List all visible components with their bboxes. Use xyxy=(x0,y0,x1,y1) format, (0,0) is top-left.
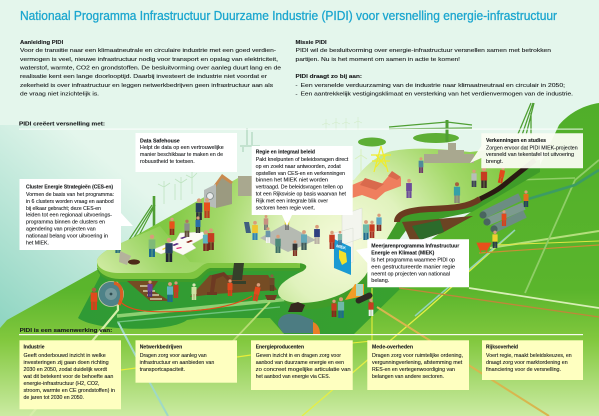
main green landscape xyxy=(0,103,599,416)
data safehouse building xyxy=(204,174,233,208)
road S-curve xyxy=(397,160,535,222)
text block: Missie PIDI: partijen. Nu is het moment om samen in actie te komen! xyxy=(296,57,460,63)
text block: Aanleiding PIDI: Aanleiding PIDI xyxy=(20,40,64,46)
callout: Regie en integraal beleid: opstellen van CES-en en verkenningen xyxy=(256,171,345,177)
panel: Industrie: investeringen zij gaan doen richting xyxy=(24,360,109,366)
callout: Regie en integraal beleid: tot een Rijksvisie op basis waarvan het xyxy=(256,192,347,198)
yellow pylon xyxy=(371,146,391,172)
panel: Mede-overheden: belangen van andere sectoren. xyxy=(372,374,444,380)
callout: Meerjarenprogramma: Meerjarenprogramma Infrastructuur xyxy=(371,244,459,250)
callout: Cluster Energie Strategieën: agendering van projecten van xyxy=(26,226,96,232)
callout: Cluster Energie Strategieën: leiden tot een regionaal uitvoerings- xyxy=(26,213,112,219)
callout: Cluster Energie Strategieën: bij elkaar gebracht; deze CES-en xyxy=(26,206,101,212)
heading: PIDI creëert versnelling met: PIDI creëert versnelling met: xyxy=(19,122,105,128)
callout: Verkenningen en studies: Verkenningen en studies xyxy=(486,138,546,144)
callout: Meerjarenprogramma: Energie en Klimaat (MIEK) xyxy=(371,251,435,257)
wind turbine near hill xyxy=(355,149,367,172)
panel: Energieproducenten: Geven inzicht in en dragen zorg voor xyxy=(256,353,341,359)
colored shapes on table xyxy=(162,236,193,250)
panel: Netwerkbedrijven: Netwerkbedrijven xyxy=(140,345,182,351)
raised plateau surface xyxy=(97,148,540,303)
text block: Aanleiding PIDI: vermogen is veel, nieuwe infrastructuur nodig voor transport en opslag van elektriciteit, xyxy=(20,57,278,63)
panel: Industrie: de jaren tot 2030 en 2050. xyxy=(24,395,84,401)
text block: Aanleiding PIDI: Voor de transitie naar een klimaatneutrale en circulaire industrie met een goed verdien- xyxy=(20,48,276,54)
steel pipes xyxy=(479,197,525,233)
laptop crate near tip xyxy=(119,251,131,265)
text block: PIDI draagt zo bij aan: Een aantrekkelijk vestigingsklimaat en versterking van het verdienvermogen van de industrie. xyxy=(300,92,573,98)
panel: Industrie: Geeft onderbouwd inzicht in welke xyxy=(24,353,106,359)
callout: Regie en integraal beleid: binnen het MIEK niet worden xyxy=(256,178,328,184)
pit under the road xyxy=(402,216,473,240)
teal roller machine xyxy=(278,302,320,335)
cable drum xyxy=(98,282,124,306)
panel: Industrie xyxy=(20,340,121,409)
panel: Mede-overheden: RES-en en vertegenwoordiging van xyxy=(372,367,455,373)
panel: Netwerkbedrijven: Dragen zorg voor aanleg van xyxy=(140,353,207,359)
callout: Meerjarenprogramma: neemt op projecten van nationaal xyxy=(371,271,450,277)
callout: Cluster Energie Strategieën: Cluster Energie Strategieën (CES-en) xyxy=(26,185,113,191)
callout: Meerjarenprogramma: een gestructureerde manier regie xyxy=(371,265,455,271)
callout: Cluster Energie Strategieën: in 6 clusters worden vraag en aanbod xyxy=(26,199,114,205)
panel: Energieproducenten: Energieproducenten xyxy=(256,345,304,351)
text block: Missie PIDI: PIDI wil de besluitvorming over energie-infrastructuur versnellen samen met betrokken xyxy=(296,48,551,54)
text block: Aanleiding PIDI xyxy=(19,40,282,98)
text block: Aanleiding PIDI: realisatie kent een lange doorlooptijd. Daarbij investeert de industrie niet voordat er xyxy=(20,74,267,80)
grey industrial buildings xyxy=(238,143,474,196)
panel: Mede-overheden: Mede-overheden xyxy=(372,345,413,351)
callout: Regie en integraal beleid: Pakt knelpunten of beleidsvragen direct xyxy=(256,157,349,163)
text block: PIDI draagt zo bij aan: Een versnelde verduurzaming van de industrie naar klimaatneutraal en circulair in 2050; xyxy=(300,83,565,89)
callout: Verkenningen en studies: versneld van tekentafel tot uitvoering xyxy=(486,152,574,158)
dark chair xyxy=(244,222,251,233)
panel: Energieproducenten: aanbod van duurzame energie en een xyxy=(256,360,344,366)
panel: Netwerkbedrijven xyxy=(136,340,237,383)
callout: Regie en integraal beleid xyxy=(252,146,353,226)
callout: Data Safehouse xyxy=(136,133,237,172)
callout: Meerjarenprogramma: Is het programma waarmee PIDI op xyxy=(371,258,455,264)
white jigsaw table xyxy=(152,232,205,255)
meeting table xyxy=(260,224,316,252)
underground dirt xyxy=(127,275,277,301)
red cable xyxy=(119,296,252,312)
network lines on the ground xyxy=(30,160,599,416)
back hills xyxy=(358,133,459,146)
panel: Mede-overheden xyxy=(367,340,469,390)
panel: Netwerkbedrijven: transportcapaciteit. xyxy=(140,367,185,373)
panel: Rijksoverheid: financiering voor de versnelling. xyxy=(486,367,561,373)
panel: Mede-overheden: vergunningverlening, afstemming met xyxy=(372,360,463,366)
heading: PIDI is een samenwerking van: PIDI is een samenwerking van: xyxy=(20,328,112,334)
callout: Cluster Energie Strategieën: nationaal belang voor uitvoering in xyxy=(26,233,108,239)
underground dark green zone xyxy=(78,262,402,335)
mine cart xyxy=(265,295,277,300)
panel: Mede-overheden: Dragen zorg voor ruimtelijke ordening, xyxy=(372,353,463,359)
title: Nationaal Programma Infrastructuur Duurzame Industrie (PIDI) voor versnelling energie-infrastructuur xyxy=(20,8,558,23)
callout: Verkenningen en studies: brengt. xyxy=(486,159,503,165)
teal gradient backdrop xyxy=(0,125,300,335)
callout: Verkenningen en studies xyxy=(470,133,583,168)
text block: Aanleiding PIDI: waterstof, warmte, CO2 en grondstoffen. De besluitvorming over aanleg duurt lang en de xyxy=(19,65,282,71)
workers and visitors xyxy=(91,157,528,318)
panel: Energieproducenten: het aanbod van energie via CES. xyxy=(256,374,330,380)
callout: Data Safehouse: robuustheid te toetsen. xyxy=(140,159,195,165)
callout: Regie en integraal beleid: op en zoekt naar antwoorden, zodat xyxy=(256,164,341,170)
panel: Industrie: 2030 en 2050, zodat duidelijk wordt xyxy=(24,367,108,373)
panel: Industrie: wat dit betekent voor de behoefte aan xyxy=(24,374,113,380)
distant offshore platform and wind turbines xyxy=(158,117,362,204)
MIEK blue sign: MIEK xyxy=(336,243,347,250)
text block: Missie PIDI xyxy=(296,40,551,63)
panel: Rijksoverheid: Rijksoverheid xyxy=(486,345,518,351)
panel: Rijksoverheid: Voert regie, maakt beleidskeuzes, en xyxy=(486,353,572,359)
red farmhouses xyxy=(352,171,401,200)
text block: PIDI draagt zo bij aan: PIDI draagt zo bij aan: xyxy=(296,74,362,80)
callout: Regie en integraal beleid: Regie en integraal beleid xyxy=(256,150,315,156)
callout: Data Safehouse: manier beschikbaar te maken en de xyxy=(140,152,223,158)
callout: Data Safehouse: Data Safehouse xyxy=(140,139,180,145)
callout: Cluster Energie Strategieën: het MIEK. xyxy=(26,240,49,246)
MIEK blue sign xyxy=(334,239,351,275)
callout: Meerjarenprogramma: belang. xyxy=(371,278,389,284)
callout: Cluster Energie Strategieën: Vormen de basis van het programma: xyxy=(26,192,114,198)
callout: Regie en integraal beleid: sectoren heen regie voert. xyxy=(256,205,315,211)
text block: Missie PIDI: Missie PIDI xyxy=(296,40,327,46)
orange wheelbarrow xyxy=(477,243,491,253)
callout: Regie en integraal beleid: vertraagd. De beleidsvragen tellen op xyxy=(256,185,343,191)
text block: Aanleiding PIDI: de vraag niet inzichtelijk is. xyxy=(20,92,99,98)
dark machine tracks xyxy=(232,263,246,284)
text block: Aanleiding PIDI: zekerheid is over infrastructuur en leggen netwerkbedrijven geen infrastructuur aan als xyxy=(20,83,273,89)
plateau bright band xyxy=(97,262,300,279)
crane and lattice masts xyxy=(127,103,534,245)
callout: Cluster Energie Strategieën: programma binnen de clusters en xyxy=(26,220,105,226)
MIEK white panels xyxy=(334,208,362,268)
stairs xyxy=(140,286,162,299)
panel: Industrie: Industrie xyxy=(24,345,45,351)
panel: Rijksoverheid xyxy=(482,340,583,380)
text block: PIDI draagt zo bij aan: - xyxy=(296,92,298,98)
callout: Regie en integraal beleid: Rijk met een integrale blik over xyxy=(256,198,328,204)
plateau pale rim xyxy=(97,226,208,273)
plateau underside shadow xyxy=(97,160,540,309)
callout: Data Safehouse: Helpt de data op een vertrouwelijke xyxy=(140,145,224,151)
text block: PIDI draagt zo bij aan xyxy=(296,74,573,98)
text block: PIDI draagt zo bij aan: - xyxy=(296,83,298,89)
callout: Meerjarenprogramma xyxy=(356,239,469,287)
panel: Industrie: energie-infrastructuur (H2, CO2, xyxy=(24,381,100,387)
panel: Netwerkbedrijven: infrastructuur en aanbieden van xyxy=(140,360,214,366)
orange digger and tracks xyxy=(345,284,373,305)
panel: Energieproducenten xyxy=(251,340,353,390)
panel: Energieproducenten: zo concreet mogelijke articulatie van xyxy=(256,367,351,373)
callout: Cluster Energie Strategieën xyxy=(20,179,133,250)
hole at plateau tip xyxy=(128,259,140,265)
callout: Verkenningen en studies: Zorgen ervoor dat PIDI MIEK-projecten xyxy=(486,145,578,151)
panel: Industrie: stroom, warmte en CE grondstoffen) in xyxy=(24,388,115,394)
excavator xyxy=(207,272,232,295)
panel: Rijksoverheid: draagt zorg voor marktordening en xyxy=(486,360,568,366)
